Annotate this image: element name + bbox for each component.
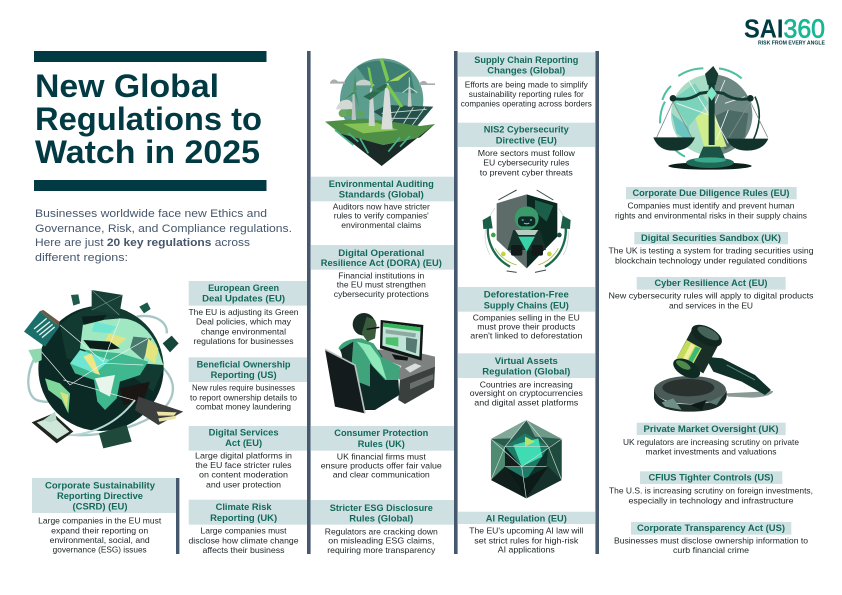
panel: Stricter ESG Disclosure Rules: Rules (Global) [349, 514, 413, 525]
panel: Cyber Resilience Act [608, 277, 814, 310]
panel: Beneficial Ownership Reporting: Beneficial Ownership [197, 359, 291, 370]
panel: Climate Risk Reporting: Reporting (UK) [210, 513, 277, 524]
panel: Beneficial Ownership Reporting: New rules require businesses [192, 384, 295, 393]
panel: Stricter ESG Disclosure Rules: on misleading ESG claims, [328, 536, 434, 545]
panel: Supply Chain Reporting Changes: Supply Chain Reporting [474, 55, 578, 66]
panel: Cyber Resilience Act: Cyber Resilience Act (EU) [654, 278, 768, 289]
panel: Corporate Transparency Act: curb financial crime [673, 546, 749, 555]
panel: NIS2 Cybersecurity Directive: Directive (EU) [496, 135, 557, 146]
panel: Climate Risk Reporting: Large companies must [200, 527, 287, 536]
panel: Beneficial Ownership Reporting: Reporting (US) [211, 370, 277, 381]
panel: Digital Services Act: and user protection [206, 480, 281, 489]
panel: Beneficial Ownership Reporting [189, 357, 307, 412]
panel: Virtual Assets Regulation: Virtual Assets [495, 356, 558, 367]
panel: Environmental Auditing Standards: Environmental Auditing [329, 179, 434, 190]
panel: Virtual Assets Regulation: Regulation (Global) [482, 367, 570, 378]
panel: Private Market Oversight: Private Market Oversight (UK) [644, 424, 778, 435]
panel: Beneficial Ownership Reporting: to report ownership details to [190, 393, 297, 402]
panel: Virtual Assets Regulation [458, 353, 595, 407]
icon: globe with documents [24, 290, 183, 448]
panel: European Green Deal Updates: regulations for businesses [194, 337, 294, 346]
panel: Corporate Due Diligence Rules: Corporate Due Diligence Rules (EU) [632, 188, 790, 199]
panel: NIS2 Cybersecurity Directive [458, 123, 595, 177]
panel: Private Market Oversight: market investments and valuations [646, 447, 776, 456]
icon: scales of justice [653, 66, 768, 170]
panel: Supply Chain Reporting Changes [458, 52, 595, 109]
panel: Virtual Assets Regulation: Countries are increasing [480, 380, 573, 389]
panel: AI Regulation: AI applications [498, 546, 555, 555]
panel: Stricter ESG Disclosure Rules [311, 500, 454, 555]
panel: AI Regulation: set strict rules for high-risk [474, 536, 579, 545]
panel: CSRD: (CSRD) (EU) [72, 502, 128, 513]
panel: NIS2 Cybersecurity Directive: EU cybersecurity rules [483, 159, 569, 168]
panel: European Green Deal Updates: Deal Updates (EU) [202, 294, 285, 304]
panel: Private Market Oversight: UK regulators are increasing scrutiny on private [623, 438, 799, 447]
panel: Consumer Protection Rules [311, 426, 454, 480]
panel: AI Regulation: AI Regulation (EU) [486, 513, 567, 524]
panel: Environmental Auditing Standards: environmental claims [341, 221, 421, 230]
panel: Supply Chain Reporting Changes: Efforts are being made to simplify [465, 81, 589, 90]
panel: Corporate Due Diligence Rules: rights and environmental risks in their supply chains [615, 211, 807, 220]
panel: Digital Securities Sandbox [608, 232, 814, 265]
panel: Digital Securities Sandbox: The UK is testing a system for trading securities using [608, 246, 814, 255]
panel: CFIUS Tighter Controls: The U.S. is increasing scrutiny on foreign investments, [609, 487, 813, 496]
icon: wind turbines on floating island [325, 58, 435, 166]
logo: SAI360: SAI [744, 16, 784, 44]
panel: CSRD: Large companies in the EU must [38, 517, 162, 526]
panel: CSRD: governance (ESG) issues [53, 546, 147, 555]
intro text [35, 208, 292, 264]
panel: Stricter ESG Disclosure Rules: requiring more transparency [327, 546, 436, 555]
panel: CFIUS Tighter Controls [609, 471, 813, 505]
panel: DORA: Digital Operational [338, 248, 424, 259]
panel: CSRD: expand their reporting on [51, 526, 149, 535]
panel: Environmental Auditing Standards: Auditors now have stricter [333, 203, 430, 212]
title block: New Global [35, 68, 219, 104]
title block: Regulations to [35, 101, 262, 137]
panel: Virtual Assets Regulation: oversight on cryptocurrencies [470, 389, 583, 398]
panel: Consumer Protection Rules: Rules (UK) [358, 439, 405, 450]
panel: Digital Services Act [189, 426, 307, 489]
panel: DORA: Resilience Act (DORA) (EU) [321, 258, 442, 269]
panel: Digital Services Act: the EU face stricter rules [196, 461, 292, 470]
panel: AI Regulation: The EU's upcoming AI law will [469, 527, 583, 536]
panel: DORA: cybersecurity protections [334, 290, 429, 299]
logo: SAI360 [744, 16, 826, 46]
panel: European Green Deal Updates: change environmental [201, 327, 286, 336]
panel: Digital Services Act: Large digital platforms in [195, 451, 292, 460]
panel: Climate Risk Reporting: affects their business [202, 546, 284, 555]
panel: Climate Risk Reporting: disclose how climate change [188, 536, 299, 545]
panel: CFIUS Tighter Controls: CFIUS Tighter Controls (US) [648, 473, 774, 484]
panel: Consumer Protection Rules: Consumer Protection [334, 428, 428, 439]
panel: Stricter ESG Disclosure Rules: Regulators are cracking down [325, 527, 438, 536]
panel: Corporate Due Diligence Rules [615, 187, 807, 220]
panel: Deforestation-Free Supply Chains [458, 287, 595, 341]
panel: CSRD [32, 478, 176, 555]
panel: CSRD: Corporate Sustainability [45, 480, 156, 491]
panel: CSRD: environmental, social, and [50, 536, 150, 545]
panel: Consumer Protection Rules: and clear communication [333, 471, 430, 480]
panel: NIS2 Cybersecurity Directive: to prevent cyber threats [480, 168, 573, 177]
panel: Consumer Protection Rules: UK financial firms must [337, 452, 427, 461]
panel: CSRD: Reporting Directive [57, 491, 143, 502]
panel: European Green Deal Updates [188, 281, 307, 346]
panel: Deforestation-Free Supply Chains: Deforestation-Free [484, 290, 569, 301]
panel: Supply Chain Reporting Changes: Changes (Global) [487, 66, 565, 77]
icon: robot shield [483, 190, 571, 272]
intro text: Businesses worldwide face new Ethics and [35, 208, 267, 220]
panel: Supply Chain Reporting Changes: companies operating across borders [461, 100, 592, 109]
panel: Environmental Auditing Standards [311, 177, 454, 230]
panel: Digital Securities Sandbox: blockchain technology under regulated conditions [615, 256, 807, 265]
panel: Climate Risk Reporting [188, 500, 307, 555]
panel: Digital Securities Sandbox: Digital Securities Sandbox (UK) [641, 233, 781, 244]
panel: DORA: the EU must strengthen [337, 280, 426, 289]
panel: NIS2 Cybersecurity Directive: More sectors must follow [478, 149, 575, 158]
title block [34, 51, 266, 191]
panel: Corporate Due Diligence Rules: Companies must identify and prevent human [628, 201, 795, 210]
panel: Deforestation-Free Supply Chains: must prove their products [477, 322, 575, 331]
panel: Deforestation-Free Supply Chains: Companies selling in the EU [473, 314, 580, 323]
panel: European Green Deal Updates: European Green [208, 283, 279, 294]
intro text: Governance, Risk, and Compliance regulations. [35, 223, 292, 235]
panel: NIS2 Cybersecurity Directive: NIS2 Cybersecurity [484, 125, 569, 136]
panel: Digital Services Act: Act (EU) [225, 438, 262, 449]
panel: Corporate Transparency Act: Corporate Transparency Act (US) [637, 523, 785, 534]
panel: Stricter ESG Disclosure Rules: Stricter ESG Disclosure [330, 503, 433, 514]
panel: Environmental Auditing Standards: rules to verify companies' [334, 211, 429, 220]
logo: SAI360: RISK FROM EVERY ANGLE [758, 40, 826, 46]
panel: Corporate Transparency Act [614, 522, 808, 555]
panel: European Green Deal Updates: Deal policies, which may [196, 318, 292, 327]
column dividers [176, 51, 599, 554]
icon: gavel [654, 320, 773, 412]
panel: Cyber Resilience Act: New cybersecurity rules will apply to digital products [608, 291, 814, 300]
panel: Virtual Assets Regulation: and digital asset platforms [474, 398, 578, 407]
panel: DORA [311, 245, 454, 299]
icon: person at computer [325, 313, 435, 413]
panel: Deforestation-Free Supply Chains: aren't linked to deforestation [470, 332, 583, 341]
panel: Consumer Protection Rules: ensure products offer fair value [321, 461, 442, 470]
logo: SAI360: 360 [784, 16, 825, 44]
panel: CFIUS Tighter Controls: especially in technology and infrastructure [628, 496, 794, 505]
panel: Private Market Oversight [623, 423, 799, 456]
panel: European Green Deal Updates: The EU is adjusting its Green [188, 308, 299, 317]
panel: Digital Services Act: on content moderation [199, 471, 288, 480]
title block: Watch in 2025 [35, 134, 260, 170]
panel: AI Regulation [458, 512, 595, 555]
panel: DORA: Financial institutions in [338, 272, 425, 281]
icon: crystal gem [491, 420, 562, 498]
panel: Corporate Transparency Act: Businesses must disclose ownership information to [614, 536, 808, 545]
intro text: different regions: [35, 252, 128, 264]
panel: Supply Chain Reporting Changes: sustainability reporting rules for [469, 90, 584, 99]
panel: Environmental Auditing Standards: Standards (Global) [339, 190, 424, 201]
panel: Cyber Resilience Act: and services in the EU [669, 301, 753, 310]
panel: Climate Risk Reporting: Climate Risk [216, 502, 272, 513]
intro text: Here are just 20 key regulations across [35, 237, 251, 249]
panel: Digital Services Act: Digital Services [209, 427, 279, 438]
panel: Beneficial Ownership Reporting: combat money laundering [196, 403, 291, 412]
panel: Deforestation-Free Supply Chains: Supply Chains (EU) [484, 300, 569, 311]
